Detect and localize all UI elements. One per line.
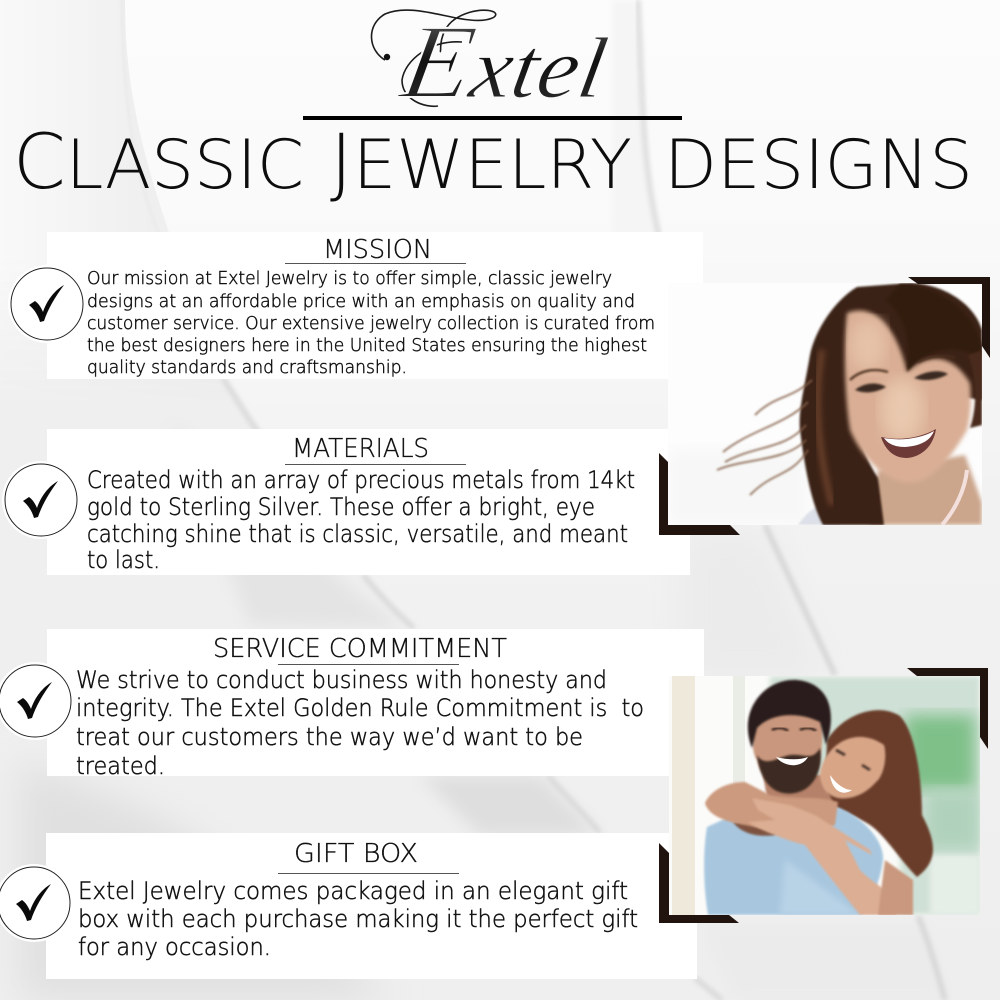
panel: gift box bbox=[46, 833, 697, 979]
service body text: treated. bbox=[76, 752, 165, 780]
man's eyes bbox=[772, 728, 816, 731]
title: JEWELRY bbox=[330, 117, 632, 206]
eyes bbox=[855, 371, 948, 392]
photo frame corners bbox=[908, 277, 990, 358]
title: CLASSIC bbox=[13, 117, 304, 206]
face bbox=[845, 310, 971, 483]
man's beard bbox=[757, 748, 821, 794]
icon: check materials bbox=[2, 461, 80, 539]
grey shading bands bbox=[20, 760, 390, 1000]
man's smile bbox=[776, 757, 808, 765]
logo underline bbox=[303, 116, 682, 120]
man's face bbox=[752, 714, 824, 776]
gift box body text: for any occasion. bbox=[78, 933, 271, 961]
woman's face bbox=[820, 737, 885, 798]
woman's eyes bbox=[836, 750, 870, 770]
eyebrows bbox=[850, 356, 955, 380]
service heading: SERVICE COMMITMENT bbox=[213, 634, 507, 664]
panel: mission bbox=[47, 232, 703, 379]
dark gap under arm bbox=[733, 820, 780, 836]
gift box body text bbox=[78, 877, 638, 961]
mission body text: Our mission at Extel Jewelry is to offer simple, classic jewelry bbox=[87, 268, 612, 289]
mouth bbox=[881, 429, 936, 458]
title: DESIGNS bbox=[664, 126, 973, 205]
wind-blown strands bbox=[717, 380, 812, 495]
mission body text: quality standards and craftsmanship. bbox=[87, 357, 407, 378]
materials body text: to last. bbox=[87, 546, 160, 574]
mission body text: designs at an affordable price with an emphasis on quality and bbox=[87, 291, 635, 312]
shirt bbox=[798, 508, 824, 525]
photo: couple embracing bbox=[659, 668, 988, 923]
panel: materials bbox=[47, 429, 690, 575]
woman's hand and forearm bbox=[748, 798, 905, 915]
icon: check mission bbox=[8, 265, 86, 343]
woman's upper arm bbox=[704, 780, 839, 830]
necklace bbox=[942, 470, 967, 525]
materials body text: Created with an array of precious metals from 14kt bbox=[87, 466, 635, 494]
icon: check gift box bbox=[0, 864, 73, 942]
icon: check service bbox=[0, 662, 74, 740]
man's shirt bbox=[704, 807, 883, 915]
fringe bbox=[886, 284, 982, 372]
service body text: treat our customers the way we’d want to be bbox=[76, 723, 583, 751]
mission body text bbox=[87, 268, 655, 378]
mission heading: MISSION bbox=[323, 235, 432, 265]
man's hair bbox=[748, 680, 831, 748]
photo frame corners bbox=[907, 668, 988, 749]
left top strip bbox=[0, 0, 30, 282]
logo: Extel: Extel bbox=[392, 3, 617, 120]
photo: smiling woman bbox=[659, 277, 990, 535]
woman's far arm bbox=[878, 860, 913, 915]
man's neck bbox=[762, 774, 833, 802]
mission body text: the best designers here in the United States ensuring the highest bbox=[87, 335, 647, 356]
title bbox=[13, 117, 973, 206]
materials body text: catching shine that is classic, versatile, and meant bbox=[87, 520, 628, 548]
panel: service commitment bbox=[47, 629, 704, 780]
mission body text: customer service. Our extensive jewelry collection is curated from bbox=[87, 313, 655, 334]
materials heading: MATERIALS bbox=[292, 434, 429, 464]
service body text: integrity. The Extel Golden Rule Commitment is to bbox=[76, 694, 644, 722]
hair highlights bbox=[818, 350, 832, 505]
gift box body text: Extel Jewelry comes packaged in an elegant gift bbox=[78, 877, 628, 905]
materials body text: gold to Sterling Silver. These offer a bright, eye bbox=[87, 493, 595, 521]
service body text: We strive to conduct business with honesty and bbox=[76, 666, 607, 694]
gift box body text: box with each purchase making it the perfect gift bbox=[78, 905, 638, 933]
service body text bbox=[76, 666, 644, 780]
fold lines bbox=[638, 0, 660, 240]
hair back bbox=[800, 283, 982, 525]
materials body text bbox=[87, 466, 635, 574]
woman's hair bbox=[825, 710, 933, 877]
neck and chest bbox=[870, 455, 982, 525]
gift box heading: GIFT BOX bbox=[294, 839, 418, 869]
woman's smile bbox=[830, 775, 852, 793]
